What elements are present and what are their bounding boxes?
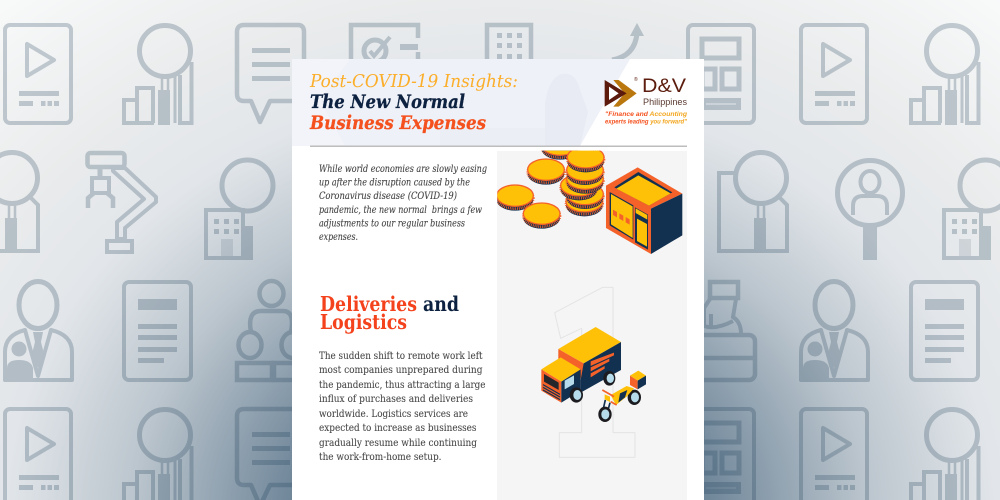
icon: delivery truck (541, 327, 621, 403)
icon: video document, bottom left (5, 409, 71, 500)
white infographic page (292, 59, 704, 500)
section body text: most companies unprepared during (319, 365, 483, 376)
icon: robot arm (88, 153, 156, 252)
icon: calculator, bottom right (688, 409, 754, 500)
intro text: pandemic, the new normal brings a few (319, 205, 482, 216)
intro text: up after the disruption caused by the (319, 178, 470, 188)
intro text: While world economies are slowly easing (319, 164, 487, 175)
icon: logo arrow mark (605, 80, 637, 107)
title: Post-COVID-19 Insights: (309, 71, 518, 92)
section body text: worldwide. Logistics services are (319, 409, 468, 420)
intro text: expenses. (319, 232, 358, 243)
icon: gold coins (497, 150, 606, 229)
header rule (310, 146, 687, 147)
logo tagline (605, 111, 688, 126)
icon: storefront box (606, 167, 682, 254)
right illustration panel (497, 151, 687, 500)
logo tagline: "Finance and Accounting (605, 111, 687, 118)
icon: video document, top left (5, 25, 71, 123)
header band (292, 59, 630, 146)
outlined number 1 (555, 287, 635, 457)
title (309, 71, 518, 134)
section body text: the pandemic, thus attracting a large (319, 380, 486, 391)
icon: magnifier with person (838, 160, 902, 260)
icon: group of people (237, 281, 309, 380)
icon: calculator, top right (688, 25, 754, 123)
intro text: Coronavirus disease (COVID-19) (319, 191, 457, 202)
icon: magnifier over building, left (204, 160, 273, 260)
icon: businessman, left (5, 282, 72, 381)
illustration: truck and motorbike over number 1 (541, 287, 646, 457)
section body text: influx of purchases and deliveries (319, 394, 473, 405)
section heading: Deliveries and Logistics: and (423, 292, 459, 316)
section body text: The sudden shift to remote work left (319, 351, 483, 362)
icon: businessman, right (801, 282, 868, 381)
icon: office block, top centre (487, 25, 531, 62)
logo wordmark: Philippines (643, 97, 687, 108)
icon: report document, left (124, 282, 191, 380)
section body text: gradually resume while continuing (319, 438, 478, 449)
logo wordmark: ® (634, 76, 638, 83)
section body text: the work-from-home setup. (319, 452, 442, 463)
icon: magnifier over building, right edge (942, 160, 1000, 260)
section heading: Deliveries and Logistics (320, 292, 459, 334)
logo: D&V Philippines (605, 75, 688, 126)
title: Business Expenses (309, 112, 486, 134)
icon: magnifier with bar chart, top left (124, 26, 192, 125)
section body text: expected to increase as businesses (319, 423, 476, 434)
icon: delivery motorbike (598, 371, 646, 422)
section heading: Deliveries and Logistics: Logistics (320, 310, 407, 334)
illustration: coins and storefront (497, 150, 682, 254)
icon: magnifier over document, left edge (0, 152, 38, 251)
icon: speech bubble, bottom (237, 409, 304, 500)
icon: checklist gauge, top centre (351, 25, 418, 62)
icon: magnifier with bar chart, bottom right (911, 410, 978, 500)
intro text (319, 164, 487, 243)
icon: magnifier with bar chart, bottom left (124, 410, 192, 500)
logo tagline: experts leading you forward" (605, 118, 688, 126)
icon: magnifier with bar chart, top right (911, 26, 978, 125)
section body text (319, 351, 486, 463)
icon: video document, top right (801, 25, 867, 123)
title: The New Normal (310, 91, 465, 113)
logo wordmark (634, 75, 687, 108)
icon: hand over stacked box (690, 282, 755, 380)
icon: rising arrow, top centre (612, 23, 644, 60)
logo wordmark: D&V (642, 75, 686, 97)
icon: magnifier over document, right (719, 152, 787, 251)
icon: video document, bottom right (801, 409, 867, 500)
icon: report document, right (911, 282, 978, 380)
intro text: adjustments to our regular business (319, 218, 465, 230)
section heading: Deliveries and Logistics: Deliveries (320, 292, 417, 316)
icon: speech bubble, top (237, 25, 304, 122)
